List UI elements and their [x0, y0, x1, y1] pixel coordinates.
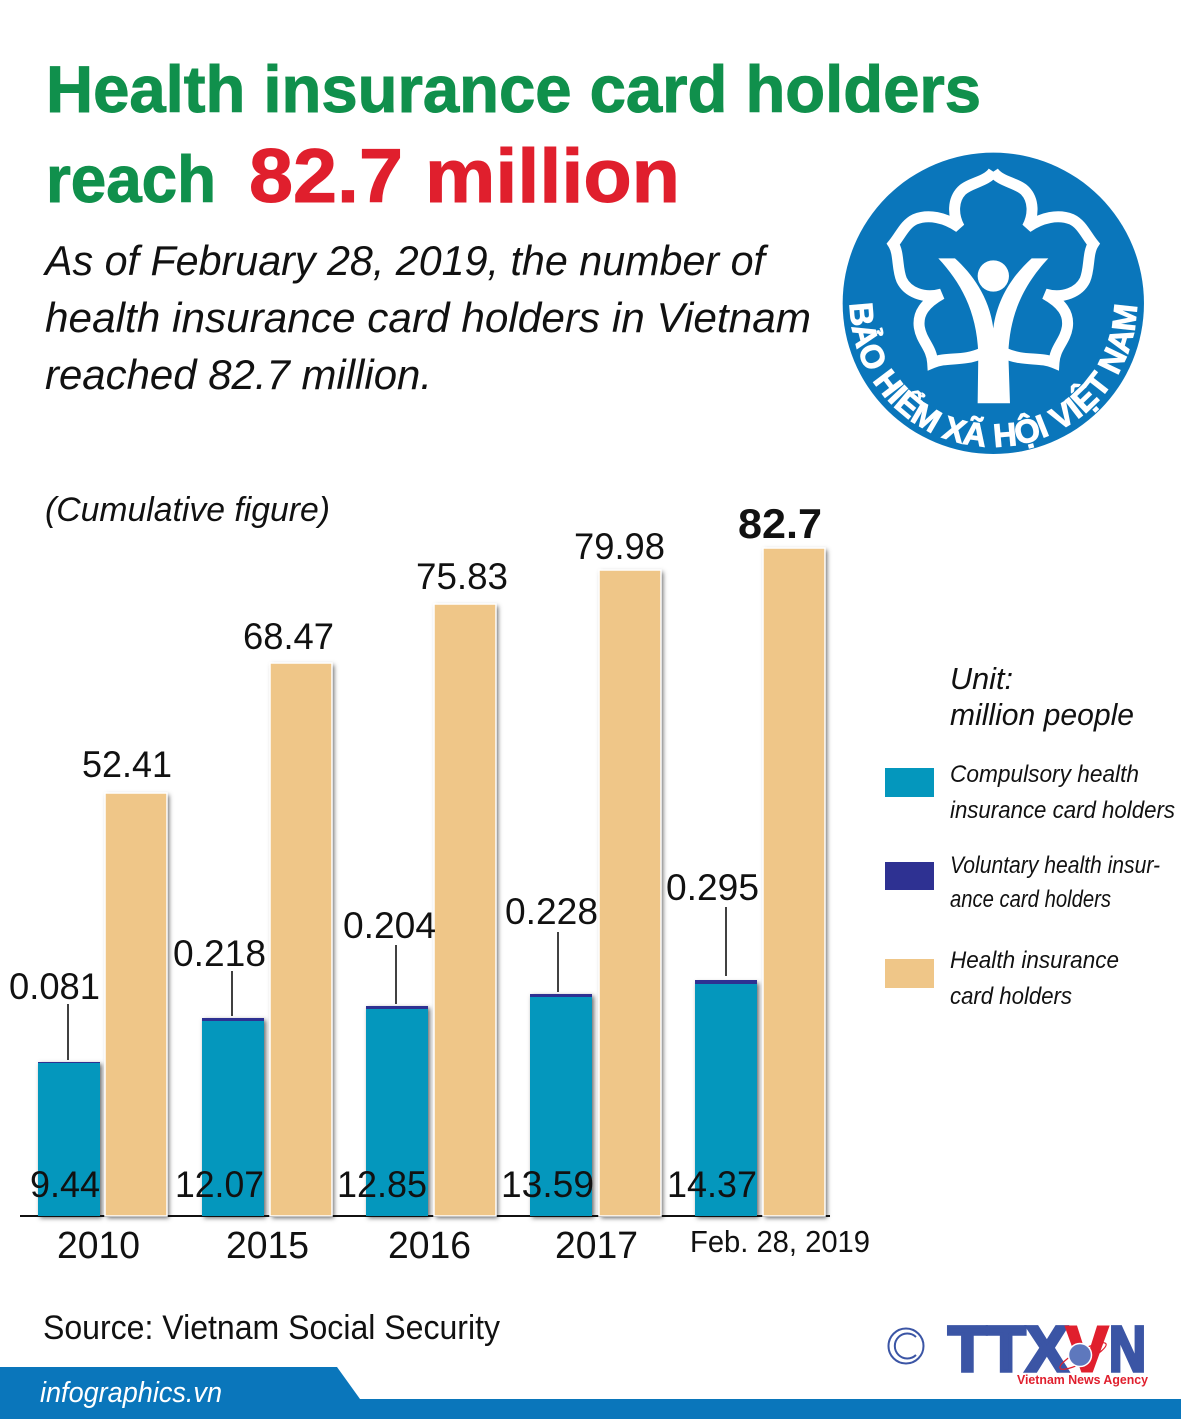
total bars	[105, 548, 825, 1216]
bar chart	[9, 500, 870, 1267]
compulsory values: 12.85	[337, 1164, 427, 1205]
compulsory values	[30, 1164, 757, 1205]
total values: 79.98	[574, 526, 665, 567]
voluntary values	[9, 867, 759, 1007]
voluntary values: 0.295	[666, 867, 759, 908]
unit label: Unit:	[950, 661, 1013, 696]
x axis labels: 2015	[226, 1225, 309, 1267]
bar shadows	[40, 550, 827, 1218]
legend: Compulsory health	[950, 761, 1139, 788]
legend	[885, 761, 1175, 1010]
title	[46, 52, 981, 219]
legend: ance card holders	[950, 886, 1111, 913]
total values: 52.41	[82, 744, 172, 785]
voluntary values: 0.081	[9, 966, 100, 1007]
logo: Vietnam Social Security: BẢO HIỂM XÃ HỘI VIỆT NAM	[849, 303, 1138, 449]
intro text: health insurance card holders in Vietnam	[45, 294, 811, 341]
chart note: (Cumulative figure)	[45, 491, 330, 529]
title: Health insurance card holders	[46, 52, 981, 126]
logo: Vietnam Social Security	[842, 152, 1144, 454]
TTXVN logo	[948, 1313, 1148, 1387]
leader lines	[68, 907, 726, 1060]
copyright icon	[888, 1328, 924, 1364]
x axis labels: Feb. 28, 2019	[690, 1224, 870, 1259]
compulsory values: 9.44	[30, 1164, 100, 1205]
compulsory bars	[38, 984, 757, 1216]
title: 82.7 million	[249, 134, 680, 219]
TTXVN logo: Vietnam News Agency	[1017, 1373, 1148, 1387]
voluntary values: 0.218	[173, 933, 266, 974]
unit label	[950, 661, 1134, 732]
total values: 68.47	[243, 616, 334, 657]
compulsory values: 13.59	[501, 1164, 594, 1205]
total values: 75.83	[416, 556, 508, 597]
compulsory values: 12.07	[175, 1164, 264, 1205]
x axis labels: 2017	[555, 1225, 638, 1267]
legend: Health insurance	[950, 947, 1119, 974]
footer band	[0, 1367, 1181, 1419]
TTXVN logo: TTX	[948, 1313, 1068, 1385]
TTXVN logo: V	[1066, 1313, 1108, 1385]
x axis labels	[57, 1224, 870, 1267]
legend: card holders	[950, 983, 1072, 1010]
x axis labels: 2016	[388, 1225, 471, 1267]
x axis labels: 2010	[57, 1225, 140, 1267]
intro text: As of February 28, 2019, the number of	[42, 237, 769, 284]
voluntary caps	[38, 980, 757, 1063]
footer band: infographics.vn	[40, 1377, 222, 1409]
voluntary values: 0.228	[505, 891, 598, 932]
total values: 82.7	[738, 500, 822, 547]
TTXVN logo: N	[1109, 1313, 1146, 1385]
unit label: million people	[950, 697, 1134, 732]
title: reach	[46, 142, 216, 216]
intro text	[42, 237, 811, 398]
compulsory values: 14.37	[667, 1164, 757, 1205]
intro text: reached 82.7 million.	[45, 351, 432, 398]
voluntary values: 0.204	[343, 905, 436, 946]
total values	[82, 500, 822, 785]
source: Source: Vietnam Social Security	[43, 1309, 500, 1347]
